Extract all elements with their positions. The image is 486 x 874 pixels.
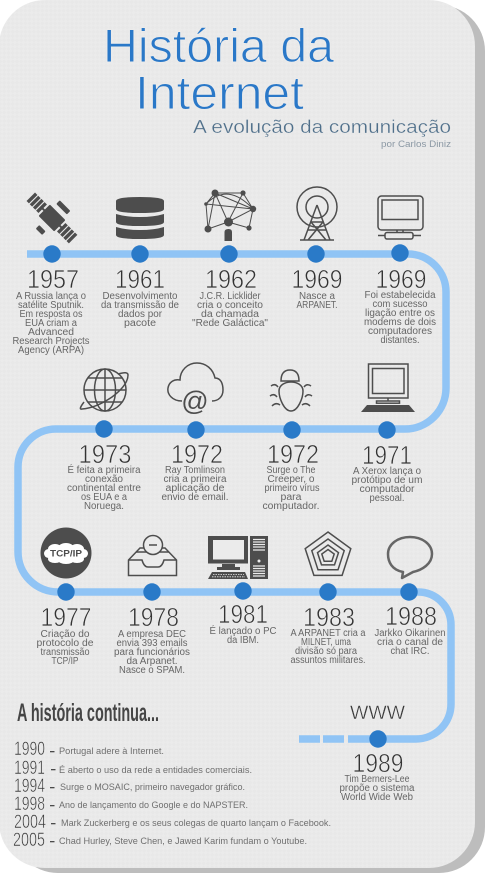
item: 1961: Desenvolvimento xyxy=(102,291,178,302)
item: 1969 modems: Foi estabelecida xyxy=(364,290,436,301)
list item: 2005: 2005 xyxy=(13,830,45,851)
item: 1962: J.C.R. Licklider xyxy=(200,291,261,302)
timeline track xyxy=(18,254,451,739)
item: 1972 email: 1972 xyxy=(171,439,223,469)
item: 1983: divisão só para xyxy=(295,646,357,657)
icon: bug xyxy=(270,370,312,411)
icon: cloud email xyxy=(168,363,223,416)
item: 1988: 1988 xyxy=(385,601,437,631)
item: 1988: cria o canal de xyxy=(377,637,443,648)
item: 1972 virus: Creeper, o xyxy=(268,474,315,485)
item: 1969 modems: com sucesso xyxy=(372,299,428,310)
item: 1972 email: Ray Tomlinson xyxy=(165,465,225,476)
item: 1969 modems: modems de dois xyxy=(364,317,436,328)
item: 1957 xyxy=(12,264,90,356)
timeline dots xyxy=(43,244,418,748)
author: por Carlos Diniz xyxy=(381,139,452,149)
item: 1981: 1981 xyxy=(218,599,268,629)
item: 1957: A Russia lança o xyxy=(16,291,86,302)
list item: 1998: 1998 xyxy=(14,794,45,815)
item: 1971: 1971 xyxy=(362,440,412,470)
item: 1978 xyxy=(114,602,190,676)
icon: satellite xyxy=(17,184,86,253)
subtitle: A evolução da comunicação xyxy=(193,116,451,137)
item: 1971: protótipo de um xyxy=(352,475,422,486)
item: 1978: Nasce o SPAM. xyxy=(119,665,185,676)
list item: 1994: 1994 xyxy=(14,776,45,797)
list item: 2004: 2004 xyxy=(14,812,46,833)
item: 1972 virus xyxy=(262,439,320,512)
item: 1961: dados por xyxy=(118,309,163,320)
icon: desktop PC xyxy=(208,536,268,579)
icon: speech bubble xyxy=(388,537,432,578)
icon: cloud email: @ xyxy=(181,386,209,416)
item: 1961: 1961 xyxy=(115,264,165,294)
icon: inbox xyxy=(128,536,176,576)
item: 1969 ARPANET: Nasce a xyxy=(299,291,335,302)
item: 1977: Criação do xyxy=(40,629,90,640)
item: 1983: assuntos militares. xyxy=(290,655,366,666)
item: 1961: pacote xyxy=(124,318,156,329)
icon: globe xyxy=(80,369,128,411)
item: 1961: da transmissão de xyxy=(101,300,179,311)
item: 1957: Agency (ARPA) xyxy=(18,345,84,356)
item: 1977 xyxy=(36,602,94,667)
list item: 1990 xyxy=(14,739,164,760)
list item: 1990: 1990 xyxy=(14,739,45,760)
item: 1962: cria o conceito xyxy=(197,300,263,311)
item: 1962: "Rede Galáctica" xyxy=(192,318,268,329)
item: 1983: 1983 xyxy=(303,602,355,632)
item: 1989: Tim Berners-Lee xyxy=(344,774,410,785)
item: 1957: Em resposta os xyxy=(20,309,82,320)
item: 1977: TCP/IP xyxy=(52,656,79,667)
item: 1972 virus: primeiro vírus xyxy=(264,483,320,494)
list item: 1991: É aberto o uso da rede a entidades comerciais. xyxy=(59,765,252,776)
item: 1969 ARPANET xyxy=(292,264,342,311)
icon: network monitor xyxy=(378,196,423,239)
heading: A história continua: A história continua... xyxy=(17,699,159,727)
item: 1969 modems: computadores xyxy=(368,326,432,337)
item: 1973 xyxy=(67,439,141,512)
icon: database xyxy=(116,197,164,239)
list item: 1998 xyxy=(14,794,248,815)
item: 1972 virus: 1972 xyxy=(267,439,319,469)
item: 1983: A ARPANET cria a xyxy=(290,628,366,639)
item: 1989: 1989 xyxy=(352,748,404,778)
item: 1981: da IBM. xyxy=(227,635,259,646)
item: 1978: para funcionários xyxy=(114,647,190,658)
icon: radio tower xyxy=(297,187,337,240)
item: 1957: Research Projects xyxy=(12,336,90,347)
item: 1973: É feita a primeira xyxy=(68,463,141,476)
item: 1973: continental entre xyxy=(67,483,141,494)
title xyxy=(103,19,335,119)
item: 1988: Jarkko Oikarinen xyxy=(374,628,446,639)
list item: 1994 xyxy=(14,776,245,797)
item: 1969 ARPANET: 1969 xyxy=(292,264,342,294)
list item: 1990: Portugal adere à Internet. xyxy=(59,746,164,757)
item: 1962 xyxy=(192,264,268,329)
item: 1971 xyxy=(352,440,422,504)
item: 1972 email: cria a primeira xyxy=(164,474,227,485)
item: 1972 virus: para xyxy=(280,492,302,503)
item: 1972 virus: computador. xyxy=(262,501,320,512)
item: 1972 virus: Surge o The xyxy=(266,465,316,476)
item: 1961 xyxy=(101,264,179,329)
item: 1989: World Wide Web xyxy=(341,792,413,803)
item: 1978: da Arpanet. xyxy=(126,656,178,667)
list item: 1998: Ano de lançamento do Google e do NAPSTER. xyxy=(59,800,248,811)
item: 1988 xyxy=(374,601,446,657)
item: 1973: os EUA e a xyxy=(81,492,127,503)
icon: TCP/IP xyxy=(40,528,92,578)
item: 1957: 1957 xyxy=(27,264,79,294)
item: 1969 modems: ligação entre os xyxy=(365,308,435,319)
item: 1978: A empresa DEC xyxy=(118,629,186,640)
item: 1957: satélite Sputnik. xyxy=(18,300,84,311)
item: 1971: computador xyxy=(360,484,415,495)
title: Internet xyxy=(135,66,304,119)
item: 1978: 1978 xyxy=(128,602,179,632)
list item: 1991: 1991 xyxy=(14,758,45,779)
item: 1969 modems: distantes. xyxy=(380,335,420,346)
icon: personal computer xyxy=(361,364,415,412)
item: 1977: 1977 xyxy=(40,602,92,632)
item: 1973: Noruega. xyxy=(84,501,124,512)
list item: 2004 xyxy=(14,812,331,833)
item: 1981: É lançado o PC xyxy=(210,624,276,637)
item: 1957: Advanced xyxy=(28,327,74,338)
icon: TCP/IP: TCP/IP xyxy=(50,548,82,558)
item: 1983 xyxy=(290,602,366,666)
item: 1971: pessoal. xyxy=(370,493,404,504)
icon: network person xyxy=(204,190,256,241)
item: 1969 ARPANET: ARPANET. xyxy=(296,300,338,311)
icon: WWW: WWW xyxy=(350,703,405,724)
item: 1989: propõe o sistema xyxy=(340,783,415,794)
item: 1977: transmissão xyxy=(40,647,90,658)
list item: 2005 xyxy=(13,830,307,851)
item: 1989 xyxy=(340,748,415,803)
title: História da xyxy=(103,19,335,72)
item: 1957: EUA criam a xyxy=(25,318,77,329)
item: 1988: chat IRC. xyxy=(390,646,430,657)
item: 1981 xyxy=(210,599,276,646)
list item: 2005: Chad Hurley, Steve Chen, e Jawed Karim fundam o Youtube. xyxy=(59,836,307,847)
icon: pentagon xyxy=(305,532,351,575)
item: 1962: da chamada xyxy=(201,309,259,320)
item: 1969 modems xyxy=(364,264,436,346)
item: 1977: protocolo de xyxy=(36,638,94,649)
item: 1972 email xyxy=(162,439,228,503)
item: 1969 modems: 1969 xyxy=(376,264,426,294)
list item: 1991 xyxy=(14,758,252,779)
list: later milestones xyxy=(13,739,331,851)
item: 1972 email: aplicação de xyxy=(166,483,225,494)
item: 1973: 1973 xyxy=(78,439,132,469)
item: 1978: envia 393 emails xyxy=(116,638,188,649)
list item: 1994: Surge o MOSAIC, primeiro navegador gráfico. xyxy=(60,782,245,793)
item: 1971: A Xerox lança o xyxy=(353,466,421,477)
item: 1972 email: envio de email. xyxy=(162,492,228,503)
item: 1983: MILNET, uma xyxy=(301,637,351,648)
item: 1962: 1962 xyxy=(205,264,257,294)
list item: 2004: Mark Zuckerberg e os seus colegas de quarto lançam o Facebook. xyxy=(61,818,331,829)
item: 1973: conexão xyxy=(85,474,123,485)
